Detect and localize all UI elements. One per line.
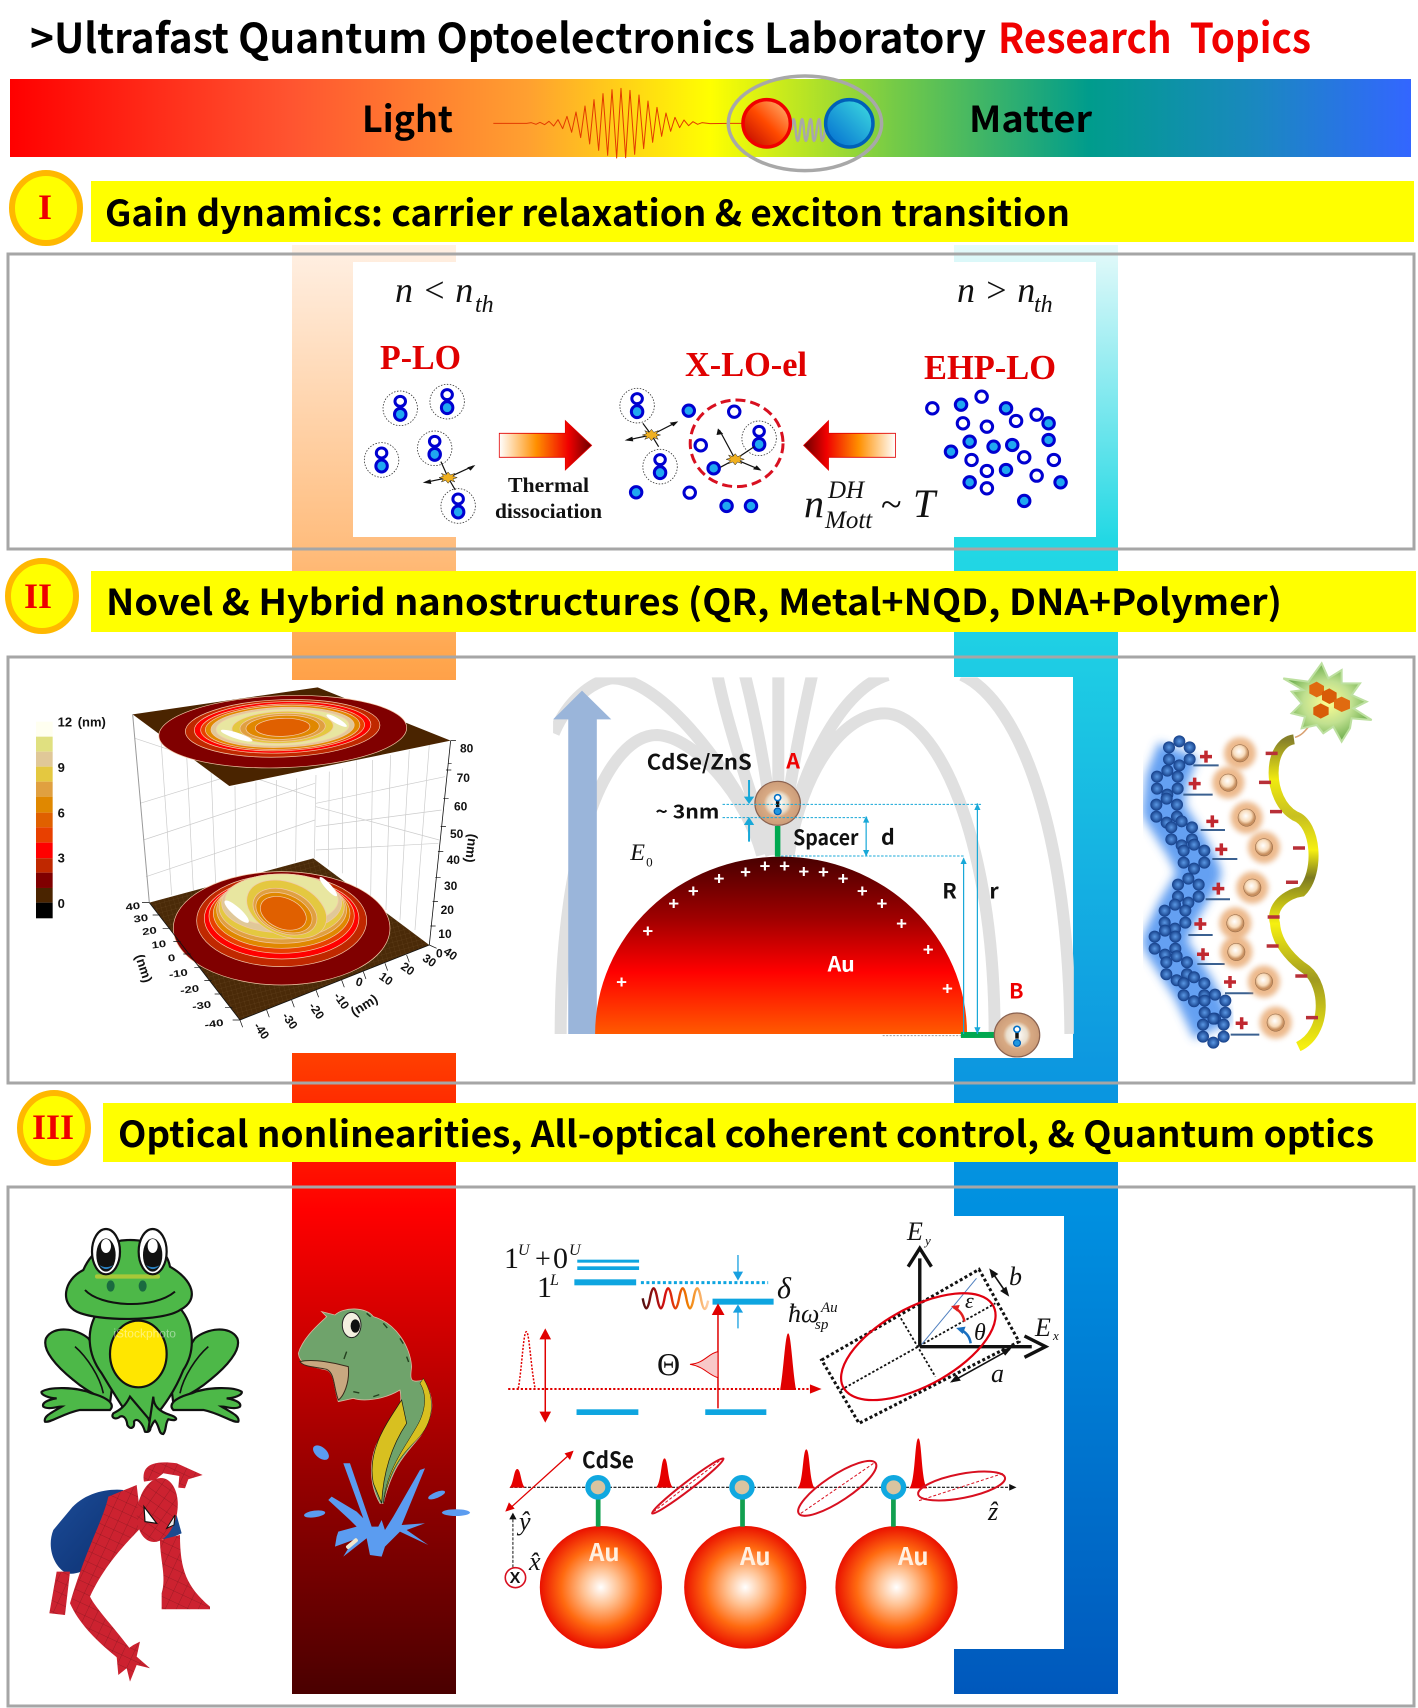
surface charges: + xyxy=(779,855,790,876)
labels: CdSe xyxy=(582,1443,634,1475)
formula: n above threshold: n > n xyxy=(957,270,1035,310)
panel I frame xyxy=(8,254,1414,549)
level and axis labels: a xyxy=(991,1359,1004,1388)
field lines xyxy=(554,675,1070,1034)
axes and tick labels: 30 xyxy=(133,913,149,925)
exciton group X-LO-el xyxy=(620,388,783,512)
level and axis labels: 1 xyxy=(537,1271,552,1304)
labels xyxy=(629,746,1024,1005)
formula: n below threshold xyxy=(395,270,494,318)
polarization ellipse xyxy=(822,1248,1046,1423)
level and axis labels: E xyxy=(1034,1313,1051,1342)
icon: green frog xyxy=(41,1229,242,1434)
labels: Au xyxy=(827,949,855,979)
axes and tick labels: 10 xyxy=(438,927,452,941)
surface charges: + xyxy=(818,861,829,882)
formula: n below threshold: n < n xyxy=(395,270,473,310)
heading II: II xyxy=(24,576,52,616)
surface charges: + xyxy=(616,971,627,992)
background stripe: light side gradient xyxy=(292,245,456,1694)
level and axis labels: b xyxy=(1009,1262,1022,1291)
surface charges: + xyxy=(642,920,653,941)
biexciton group P-LO xyxy=(364,384,475,523)
propagation axis xyxy=(510,1484,1016,1491)
arrow: Mott transition xyxy=(804,421,895,470)
light-matter spectrum bar xyxy=(10,76,1411,171)
surface charges: + xyxy=(857,880,868,901)
carrier diagrams xyxy=(364,384,1066,523)
quantum dot A xyxy=(755,781,800,825)
axes and tick labels: -20 xyxy=(306,1000,327,1022)
axes and tick labels: 30 xyxy=(444,879,458,893)
label: X-LO-el: X-LO-el xyxy=(685,345,807,384)
panel III frame xyxy=(8,1187,1414,1706)
axes and tick labels: 10 xyxy=(377,969,396,989)
formula: Mott density: T xyxy=(913,481,938,526)
panel II frame xyxy=(8,657,1414,1083)
white backing behind panel II centre figure xyxy=(954,677,1073,1058)
formula: Mott density xyxy=(804,477,938,534)
legend: height colour bar: 9 xyxy=(58,760,65,775)
formula: n below threshold: th xyxy=(475,292,494,318)
polymer glow xyxy=(1163,750,1213,1030)
heading II xyxy=(8,561,1416,632)
growing pulses xyxy=(509,1438,927,1488)
axes and tick labels: -40 xyxy=(204,1018,224,1031)
Au spheres xyxy=(540,1526,958,1649)
white backing behind panel III figure xyxy=(954,1216,1064,1649)
level and axis labels: U xyxy=(518,1242,531,1259)
dimension lines xyxy=(723,780,983,1036)
surface charges: + xyxy=(759,855,770,876)
legend: height colour bar: 0 xyxy=(58,896,65,911)
axes and tick labels: (nm) xyxy=(348,991,380,1019)
figure: DNA polymer and NQD hybrid xyxy=(1149,663,1372,1049)
level and axis labels: δ xyxy=(777,1272,792,1305)
surface charges xyxy=(616,855,953,999)
axes and tick labels: -40 xyxy=(251,1020,272,1042)
polymer hexagon chain xyxy=(1149,735,1231,1049)
surface charges: + xyxy=(877,893,887,914)
icon: spider-man xyxy=(49,1462,210,1682)
heading II: Novel & Hybrid nanostructures (QR, Metal+NQD, DNA+Polymer) xyxy=(106,574,1282,626)
axes and tick labels xyxy=(125,741,481,1042)
labels: A xyxy=(785,746,800,775)
axes and tick labels: 40 xyxy=(447,853,460,867)
legend: height colour bar: 3 xyxy=(58,851,65,866)
axes and tick labels: 0 xyxy=(436,946,443,960)
surface charges: + xyxy=(798,861,809,881)
level and axis labels: sp xyxy=(815,1317,829,1333)
level and axis labels: 0 xyxy=(553,1242,568,1275)
legend: height colour bar: 6 xyxy=(58,805,65,820)
labels xyxy=(510,1443,999,1587)
axes and tick labels: 80 xyxy=(460,742,474,756)
negative charges xyxy=(1259,753,1318,1018)
axes and tick labels: 40 xyxy=(125,901,141,913)
axes and tick labels: 60 xyxy=(454,800,468,814)
axes and tick labels: 40 xyxy=(441,944,460,964)
figure: Au nanoparticle with quantum dots xyxy=(553,675,1070,1057)
DNA ribbon xyxy=(1274,739,1321,1047)
detuning arrows xyxy=(733,1255,743,1328)
linear polarization arrow xyxy=(505,1451,574,1512)
top projection map xyxy=(133,687,451,786)
background stripe: matter side gradient xyxy=(954,245,1118,1694)
chart: 3D surface plot of quantum ring xyxy=(36,687,481,1042)
arrow: incident field E0 xyxy=(553,691,611,1034)
labels: E xyxy=(629,840,645,866)
icon: tadpole leaping from water xyxy=(298,1309,470,1557)
level and axis labels: L xyxy=(549,1272,559,1289)
spacers xyxy=(775,826,995,1038)
formula: n above threshold xyxy=(957,270,1053,318)
surface charges: + xyxy=(838,868,849,889)
quantum dot B xyxy=(994,1013,1040,1057)
white backing behind panel II left figure xyxy=(292,680,456,1053)
axes and tick labels: 20 xyxy=(142,926,158,938)
level and axis labels: ε xyxy=(965,1288,974,1313)
relaxation wave xyxy=(643,1288,708,1309)
figure: CdSe dots on Au spheres pulse chain xyxy=(505,1438,1016,1649)
axes and tick labels: -10 xyxy=(331,990,352,1012)
label: P-LO: P-LO xyxy=(380,338,461,377)
formula: n above threshold: th xyxy=(1034,292,1053,318)
axes and tick labels: -30 xyxy=(192,1000,212,1012)
heading I: Gain dynamics: carrier relaxation & exciton transition xyxy=(105,185,1070,237)
level and axis labels: U xyxy=(569,1242,582,1259)
arrow: thermal dissociation xyxy=(499,421,592,470)
level and axis labels: + xyxy=(535,1244,551,1275)
labels: ~ 3nm xyxy=(655,796,719,824)
label: EHP-LO: EHP-LO xyxy=(924,348,1056,387)
formula: Mott density: Mott xyxy=(824,507,873,534)
axes and tick labels: (nm) xyxy=(132,952,155,984)
formula: Mott density: ~ xyxy=(881,484,902,526)
axes and tick labels: 20 xyxy=(398,959,417,979)
surface charges: + xyxy=(688,880,699,901)
heading III: III xyxy=(32,1107,74,1147)
level and axis labels: y xyxy=(923,1233,931,1248)
labels: X xyxy=(510,1570,521,1587)
bottom surface xyxy=(149,858,429,1020)
labels: r xyxy=(989,876,1000,906)
icon: green frog: iStockphoto xyxy=(113,1326,176,1340)
level and axis labels: 1 xyxy=(504,1242,519,1275)
level and axis labels: Θ xyxy=(657,1346,680,1382)
surface charges: + xyxy=(942,978,953,999)
axes and tick labels: -10 xyxy=(168,968,189,980)
labels: Au xyxy=(897,1537,929,1572)
surface charges: + xyxy=(740,861,751,882)
label: thermal dissociation: Thermal xyxy=(508,473,589,497)
pulse propagation xyxy=(508,1328,822,1423)
heading III xyxy=(20,1093,1416,1163)
title: Research Topics xyxy=(998,5,1311,65)
excitation arrow and pulse area xyxy=(690,1303,725,1408)
energy level bars xyxy=(574,1260,774,1415)
legend: height colour bar xyxy=(36,715,106,918)
axes and tick labels: 0 xyxy=(354,974,365,990)
NQD starburst xyxy=(1283,663,1372,742)
legend: height colour bar: 12 xyxy=(58,715,76,730)
axes and tick labels: 0 xyxy=(167,953,176,964)
labels: R xyxy=(942,876,957,906)
polarization ellipses xyxy=(649,1453,1008,1524)
label: thermal dissociation xyxy=(495,473,602,523)
CdSe dots xyxy=(585,1475,906,1500)
level and axis labels: E xyxy=(906,1217,923,1246)
axes and tick labels: 10 xyxy=(151,939,167,951)
Au hemisphere xyxy=(595,857,967,1034)
labels: Au xyxy=(588,1533,620,1568)
axes and tick labels: (nm) xyxy=(462,833,481,863)
3D box grid xyxy=(135,738,445,930)
surface charges: + xyxy=(896,913,907,934)
axes and tick labels: -30 xyxy=(279,1010,301,1032)
legend: height colour bar: (nm) xyxy=(78,715,106,730)
level and axis labels: ħω xyxy=(788,1299,819,1328)
heading I: I xyxy=(38,187,52,227)
spacers xyxy=(596,1498,896,1527)
positive linkers xyxy=(1183,751,1259,1035)
label: Matter: Matter xyxy=(969,91,1092,143)
surface charges: + xyxy=(714,868,725,889)
heading I xyxy=(12,173,1414,243)
icon: light pulse and exciton pair xyxy=(493,76,882,171)
panel I: gain dynamics figure xyxy=(353,262,1096,537)
level and axis labels: x xyxy=(1052,1328,1059,1343)
electron-hole plasma group xyxy=(927,391,1066,507)
labels: Spacer xyxy=(793,822,859,852)
level and axis labels: Au xyxy=(820,1300,838,1316)
title: >Ultrafast Quantum Optoelectronics Laboratory xyxy=(30,5,986,65)
labels: ẑ xyxy=(987,1497,999,1526)
labels: 0 xyxy=(646,856,653,870)
axes and tick labels: 70 xyxy=(457,771,470,785)
formula: Mott density: DH xyxy=(827,477,866,504)
figure: energy levels and polarization ellipse xyxy=(504,1217,1059,1423)
surface charges: + xyxy=(923,939,934,960)
level and axis labels xyxy=(504,1217,1059,1388)
labels: ŷ xyxy=(516,1507,531,1536)
axes and tick labels: 50 xyxy=(450,827,464,841)
label: thermal dissociation: dissociation xyxy=(495,499,602,523)
labels: Au xyxy=(739,1537,771,1572)
axes and tick labels: -20 xyxy=(180,984,200,996)
axes and tick labels: 30 xyxy=(420,951,439,970)
labels: CdSe/ZnS xyxy=(647,747,752,776)
axes and tick labels: 20 xyxy=(441,903,454,917)
level and axis labels: θ xyxy=(974,1320,986,1346)
heading III: Optical nonlinearities, All-optical coherent control, & Quantum optics xyxy=(118,1106,1374,1158)
surface charges: + xyxy=(668,893,679,914)
charged beads xyxy=(1212,737,1292,1039)
formula: Mott density: n xyxy=(804,481,824,526)
label: Light: Light xyxy=(362,91,453,143)
labels: x̂ xyxy=(528,1547,541,1576)
labels: B xyxy=(1009,976,1024,1005)
labels: d xyxy=(881,822,895,851)
coordinate axes xyxy=(505,1513,526,1588)
